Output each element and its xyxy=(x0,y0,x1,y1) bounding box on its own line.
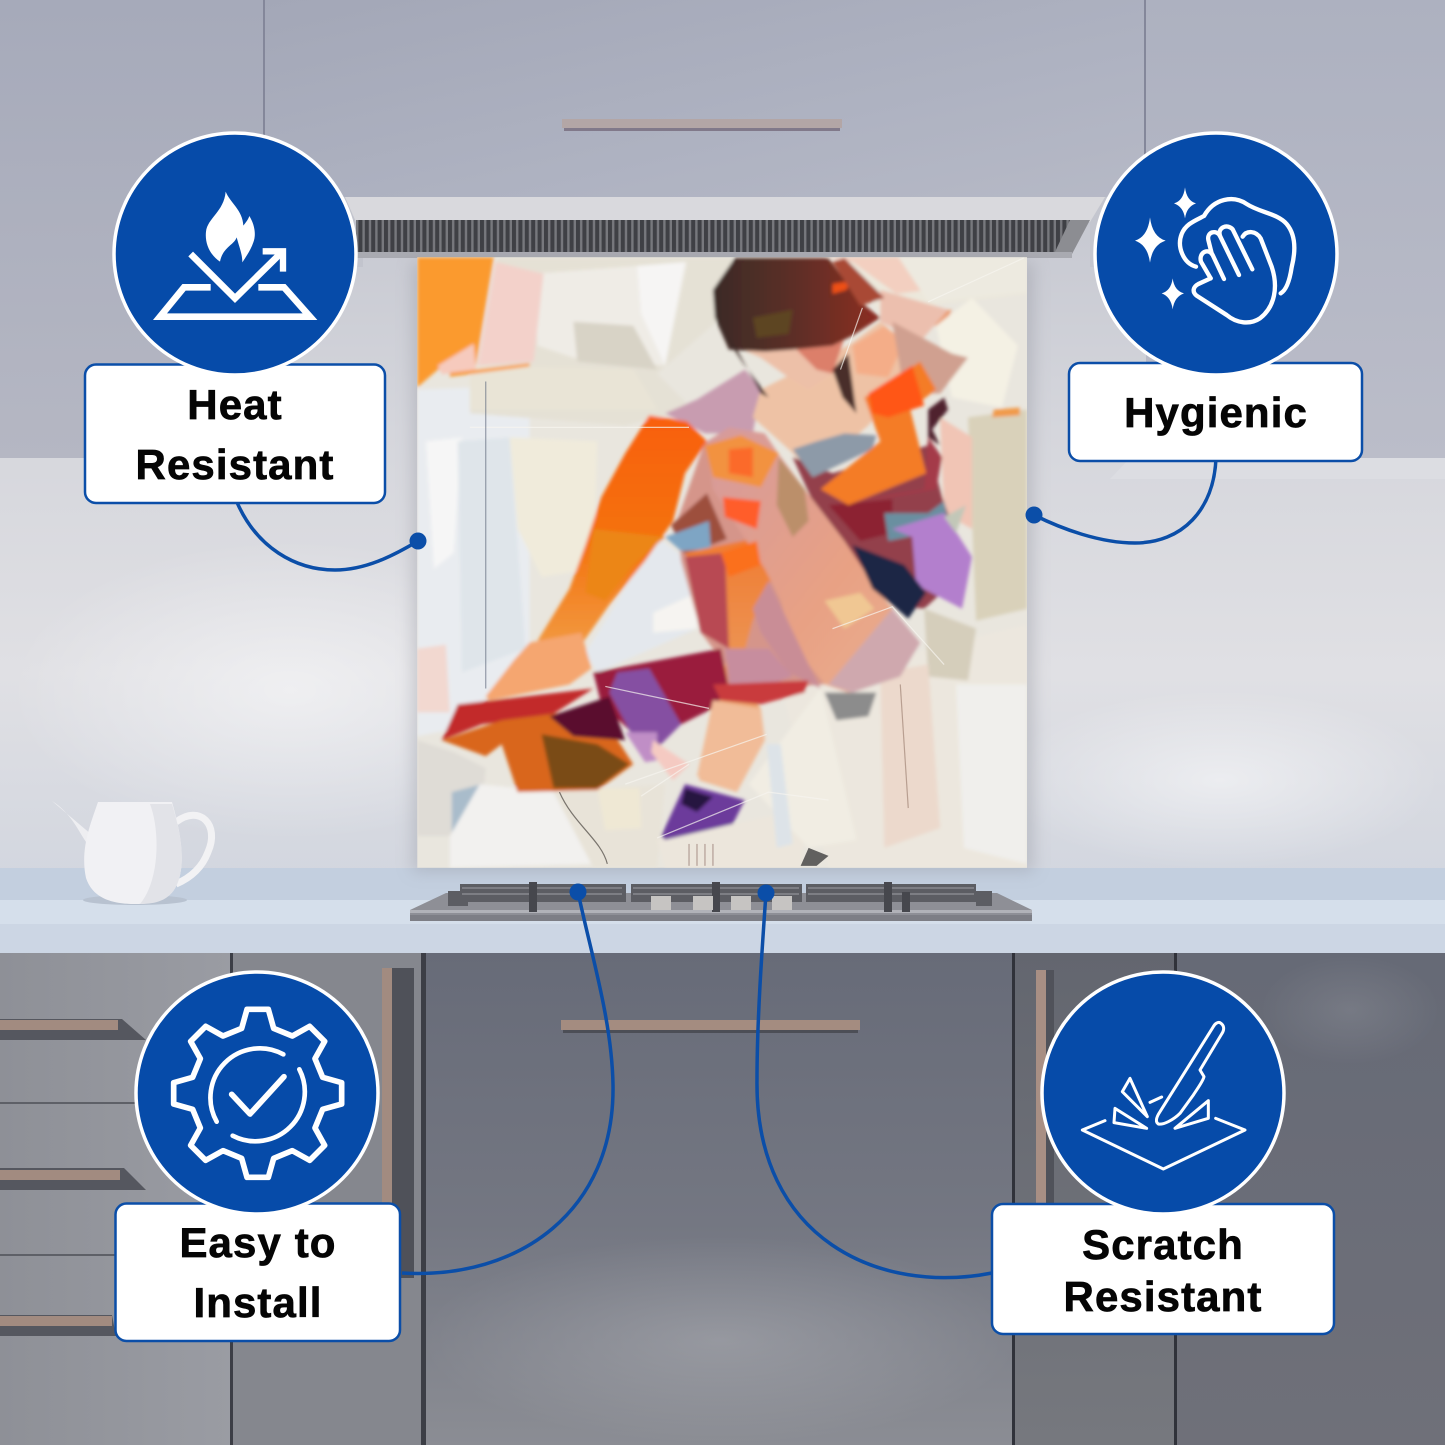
grates xyxy=(448,884,992,906)
painting xyxy=(412,257,1034,872)
icon circle: install xyxy=(136,972,378,1214)
painting scratch lines xyxy=(470,258,1024,838)
teapot xyxy=(52,801,212,905)
cabinet underside right xyxy=(1110,458,1445,479)
knobs xyxy=(651,896,792,910)
icon circle: heat xyxy=(114,133,356,375)
wall xyxy=(0,190,1445,880)
icon: hand wiping with sparkles xyxy=(1135,187,1294,322)
painting background blocks xyxy=(417,386,530,736)
label text: easy to install: Install xyxy=(193,1279,323,1326)
label text: hygienic: Hygienic xyxy=(1124,389,1308,436)
label text: easy to install: Easy to xyxy=(179,1219,337,1266)
label text: heat resistant: Heat xyxy=(187,381,283,428)
upper handle xyxy=(562,119,842,131)
painting shadow xyxy=(412,262,1034,872)
centre handle xyxy=(561,1020,860,1033)
connector: scratch xyxy=(757,884,992,1278)
vertical handle right xyxy=(1036,970,1054,1205)
drawer handles xyxy=(0,1019,146,1336)
counter xyxy=(0,900,1445,953)
wall behind hood sides xyxy=(263,197,363,267)
range hood xyxy=(345,197,1105,258)
upper centre cabinet xyxy=(265,0,1144,197)
upper right cabinet xyxy=(1146,0,1445,458)
painting drips xyxy=(689,844,713,866)
label text: heat resistant xyxy=(136,381,334,488)
label text: scratch resistant xyxy=(1064,1221,1262,1320)
label text: heat resistant: Resistant xyxy=(136,441,334,488)
label box: heat xyxy=(85,364,385,503)
callout: heat resistant xyxy=(85,133,426,570)
label box: hygienic xyxy=(1069,363,1362,461)
icon: flame over surface with arrow xyxy=(160,192,310,317)
cabinet underside left xyxy=(0,458,90,479)
icon circle: hygienic xyxy=(1095,133,1337,375)
label box: scratch xyxy=(992,1204,1334,1334)
upper left cabinet xyxy=(0,0,263,458)
connector: install xyxy=(402,884,613,1273)
connector: heat xyxy=(236,500,426,570)
label text: scratch resistant: Scratch xyxy=(1082,1221,1244,1268)
callout: hygienic xyxy=(1026,133,1362,543)
lower cabinet right door xyxy=(1014,953,1175,1445)
icon circle: scratch xyxy=(1042,972,1284,1214)
lower cabinets left xyxy=(0,953,232,1445)
callout: scratch resistant xyxy=(757,884,1334,1334)
connector: hygienic xyxy=(1026,458,1216,543)
icon: knife scratching surface xyxy=(1082,1022,1245,1169)
label box: install xyxy=(116,1204,400,1341)
painting figure xyxy=(665,370,761,433)
cooktop xyxy=(410,882,1032,921)
label text: easy to install xyxy=(179,1219,337,1326)
vertical handle left xyxy=(382,968,414,1278)
callout: easy to install xyxy=(116,884,613,1341)
counter backsplash lower xyxy=(0,868,1445,902)
wall light patch xyxy=(10,540,570,840)
label text: scratch resistant: Resistant xyxy=(1064,1273,1262,1320)
lower cabinets centre xyxy=(426,953,1012,1445)
cabinet soft light xyxy=(420,1236,1020,1444)
icon: gear with check mark xyxy=(174,1009,342,1177)
